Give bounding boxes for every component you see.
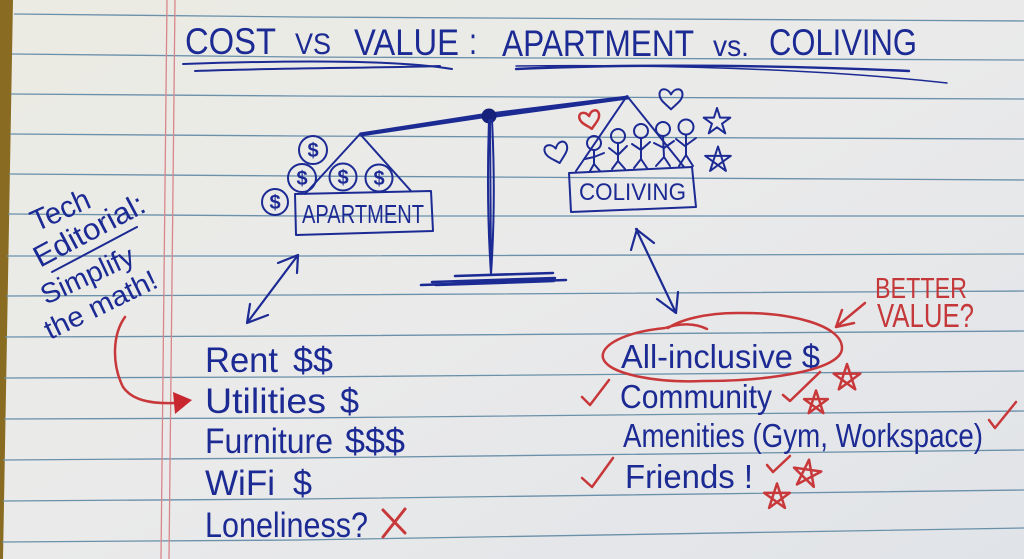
- better value callout: [836, 273, 974, 334]
- icon: red cross: [383, 509, 405, 537]
- apartment cost list: $$$: [345, 422, 405, 461]
- red arrow to ellipse: [836, 303, 865, 327]
- better value callout: BETTER: [875, 273, 967, 305]
- icon: coin stack: $: [296, 168, 308, 190]
- title: COLIVING: [769, 22, 917, 63]
- title: VALUE: [354, 22, 459, 63]
- title: VS: [295, 28, 331, 61]
- icon: coin stack: $: [307, 140, 319, 162]
- icon: blue pentagram star: [705, 146, 731, 171]
- icon: outline heart top: [660, 89, 682, 109]
- red stars: [764, 364, 860, 508]
- apartment cost list: Loneliness?: [205, 506, 368, 545]
- coliving box: [569, 167, 696, 212]
- coliving value list: [620, 338, 983, 495]
- coliving hanger: [576, 96, 684, 171]
- icon: coin stack: $: [373, 168, 385, 190]
- icon: blue outline star: [704, 108, 730, 133]
- apartment cost list: Utilities: [205, 382, 326, 421]
- apartment box: [295, 191, 433, 235]
- icon: coin stack: $: [337, 167, 349, 189]
- icon: red heart: [578, 110, 602, 131]
- apartment cost list: Furniture: [205, 422, 333, 461]
- side note: tech editorial: Editorial:: [28, 188, 151, 274]
- coliving box: COLIVING: [579, 179, 686, 206]
- icon: coin stack: [262, 136, 392, 215]
- double arrow: coliving: [631, 229, 678, 313]
- coliving value list: Friends !: [625, 458, 753, 495]
- title: APARTMENT: [502, 23, 694, 64]
- balance scale: [360, 96, 628, 285]
- better value callout: VALUE?: [877, 297, 974, 334]
- title: [183, 21, 947, 83]
- apartment side: [262, 134, 433, 235]
- apartment cost list: [205, 341, 405, 545]
- title: :: [469, 21, 477, 62]
- icon: five stick figures: [585, 120, 696, 171]
- coliving value list: All-inclusive $: [621, 338, 820, 375]
- side note: tech editorial: the math!: [39, 264, 162, 345]
- title: COST: [185, 21, 276, 62]
- coliving value list: Community: [620, 378, 772, 415]
- apartment cost list: WiFi: [205, 464, 275, 503]
- red ellipse around all-inclusive: [603, 313, 842, 381]
- icon: outline heart left: [543, 141, 571, 166]
- apartment box: APARTMENT: [302, 199, 424, 229]
- side note: tech editorial: Simplify: [35, 240, 139, 310]
- apartment cost list: $: [293, 464, 312, 503]
- red arrow to utilities: [115, 317, 192, 414]
- side note: tech editorial: Tech: [25, 183, 95, 238]
- apartment hanger: [305, 134, 411, 194]
- double arrow: apartment: [247, 255, 298, 323]
- coliving side: [543, 89, 731, 212]
- apartment cost list: $$: [293, 341, 333, 380]
- side note: tech editorial: [25, 183, 162, 345]
- apartment cost list: $: [340, 382, 359, 421]
- apartment cost list: Rent: [205, 341, 278, 380]
- icon: coin stack: $: [269, 192, 281, 214]
- red checkmarks: [582, 372, 1016, 487]
- title: vs.: [713, 30, 749, 63]
